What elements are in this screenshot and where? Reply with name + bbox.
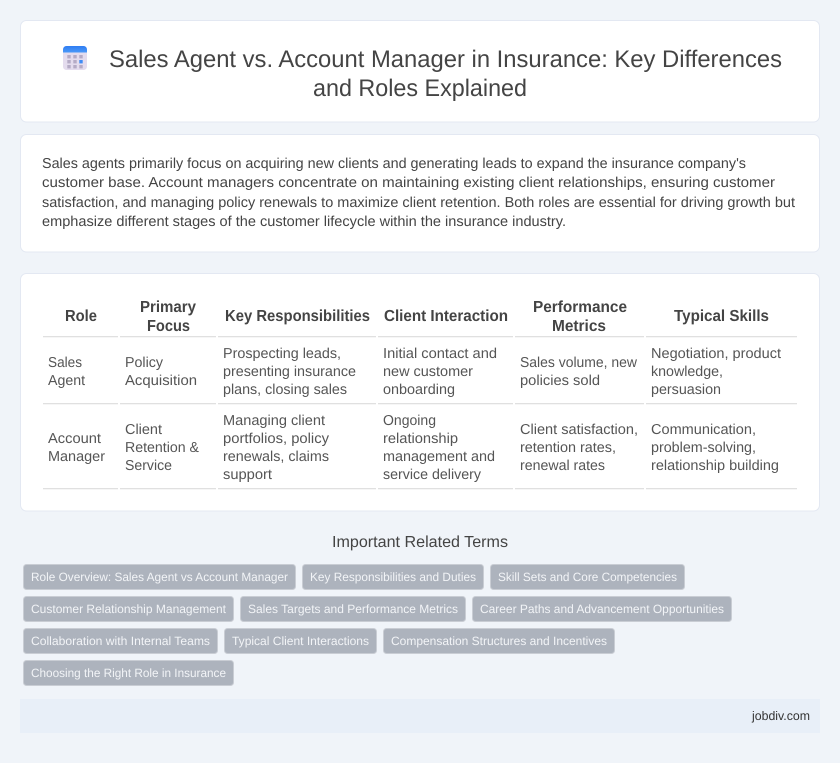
table row: sales agent: Initial contact and — [383, 346, 497, 362]
heading: important related terms: Important Related Terms — [332, 534, 508, 551]
related term chips — [24, 564, 732, 686]
table row: account manager: Retention & — [125, 440, 199, 456]
table row: sales agent: presenting insurance — [223, 364, 356, 380]
table header: Role — [65, 308, 97, 325]
title: Sales Agent vs. Account Manager in Insurance: Key Differences — [109, 46, 782, 73]
footer: jobdiv.com — [751, 709, 810, 723]
related term chips: Choosing the Right Role in Insurance — [31, 666, 226, 680]
table row: account manager: relationship — [383, 431, 458, 447]
table header: Primary — [140, 299, 196, 316]
footer — [20, 699, 820, 733]
table row: account manager: Manager — [48, 449, 105, 465]
related term chips: Role Overview: Sales Agent vs Account Manager — [31, 570, 288, 584]
table row: sales agent: persuasion — [651, 382, 721, 398]
table header: Client Interaction — [384, 308, 508, 325]
table row: sales agent: Sales — [48, 355, 82, 371]
header panel — [20, 20, 820, 122]
related term chips: Customer Relationship Management — [31, 602, 227, 616]
table row: account manager: portfolios, policy — [223, 431, 330, 447]
table row: sales agent: plans, closing sales — [223, 382, 347, 398]
title: and Roles Explained — [313, 75, 527, 102]
table row: sales agent: Prospecting leads, — [223, 346, 341, 362]
panel: intro paragraph — [20, 134, 820, 252]
table row: account manager: renewal rates — [520, 458, 605, 474]
related term chips: Compensation Structures and Incentives — [391, 634, 607, 648]
related term chips: Career Paths and Advancement Opportunities — [480, 602, 724, 616]
table header: Performance — [533, 299, 627, 316]
table row: sales agent: Policy — [125, 355, 164, 371]
table header: Key Responsibilities — [225, 308, 370, 325]
table row: account manager: service delivery — [383, 467, 482, 483]
related term chips: Skill Sets and Core Competencies — [498, 570, 677, 584]
table row: account manager: Account — [48, 431, 101, 447]
table row: sales agent — [48, 346, 781, 398]
table row: sales agent: Negotiation, product — [651, 346, 781, 362]
table row: account manager: Client satisfaction, — [520, 422, 638, 438]
table row: account manager: retention rates, — [520, 440, 616, 456]
table row: account manager: relationship building — [651, 458, 779, 474]
text block: summary: emphasize different stages of the customer lifecycle within the insurance industry. — [42, 214, 566, 230]
text block: summary — [42, 156, 795, 230]
table row: sales agent: knowledge, — [651, 364, 723, 380]
title — [109, 46, 782, 102]
table row: sales agent: onboarding — [383, 382, 455, 398]
table row: account manager — [48, 413, 779, 483]
table header: Typical Skills — [674, 308, 769, 325]
related term chips: Collaboration with Internal Teams — [31, 634, 210, 648]
table row: account manager: Communication, — [651, 422, 756, 438]
table row: account manager: renewals, claims — [223, 449, 329, 465]
table row: sales agent: Sales volume, new — [520, 355, 638, 371]
table row: sales agent: Agent — [48, 373, 85, 389]
table row: account manager: Service — [125, 458, 172, 474]
table row: sales agent: policies sold — [520, 373, 600, 389]
table header — [65, 299, 769, 335]
related term chips: Key Responsibilities and Duties — [310, 570, 476, 584]
table header: Metrics — [552, 318, 606, 335]
table row: account manager: support — [223, 467, 272, 483]
text block: summary: Sales agents primarily focus on acquiring new clients and generating leads to expand the insurance company's — [42, 156, 746, 172]
related term chips: Sales Targets and Performance Metrics — [248, 602, 458, 616]
table row: account manager: problem-solving, — [651, 440, 756, 456]
table row: account manager: Ongoing — [383, 413, 436, 429]
text block: summary: customer base. Account managers concentrate on maintaining existing client relationships, ensuring customer — [42, 175, 775, 191]
table row: sales agent: Acquisition — [125, 373, 197, 389]
related term chips: Typical Client Interactions — [232, 634, 369, 648]
table row: account manager: management and — [383, 449, 495, 465]
icon: calendar — [63, 46, 87, 70]
table header: Focus — [147, 318, 190, 335]
panel: comparison table — [20, 274, 820, 511]
table row: sales agent: new customer — [383, 364, 473, 380]
table row: account manager: Client — [125, 422, 162, 438]
table row: account manager: Managing client — [223, 413, 325, 429]
text block: summary: satisfaction, and managing policy renewals to maximize client retention. Both roles are essential for driving growth but — [42, 195, 795, 211]
